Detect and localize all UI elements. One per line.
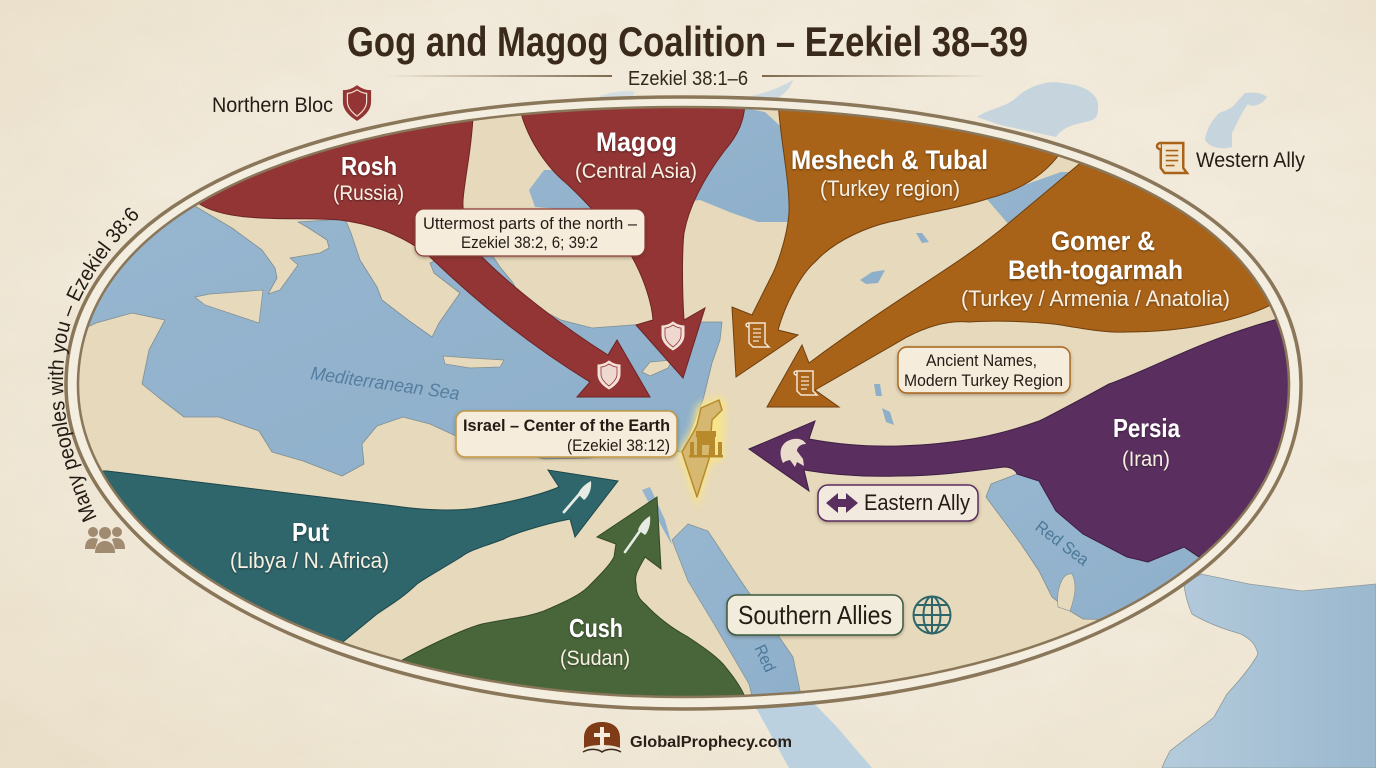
label: Rosh xyxy=(333,151,404,205)
legend: Northern Bloc: Northern Bloc xyxy=(212,94,333,117)
map inside ring xyxy=(79,108,1288,696)
callout: ancient names xyxy=(898,347,1070,393)
arrow: Put xyxy=(60,470,618,646)
subtitle with rules: Ezekiel 38:1–6 xyxy=(628,68,748,90)
label: Persia: Persia xyxy=(1113,413,1180,443)
icon: helmet on Persia arrow xyxy=(781,439,806,467)
Black Sea xyxy=(529,108,790,222)
label: Magog: (Central Asia) xyxy=(575,160,697,183)
footer brand: GlobalProphecy.com xyxy=(630,734,792,751)
icon: group of people xyxy=(85,527,125,553)
outer map: seas and lakes beyond the ring xyxy=(598,80,1376,768)
territory xyxy=(682,400,722,497)
label: Rosh: (Russia) xyxy=(333,182,404,205)
arrow: Rosh xyxy=(190,100,650,397)
callout: uttermost parts: Ezekiel 38:2, 6; 39:2 xyxy=(461,233,598,252)
Cyprus xyxy=(642,360,672,376)
arrow: Magog xyxy=(518,100,745,378)
icon: double arrow xyxy=(826,493,858,513)
legend: Northern Bloc xyxy=(212,86,370,120)
icon: shield on Magog arrow xyxy=(662,322,684,350)
Persian Gulf xyxy=(986,474,1210,620)
label: Cush: (Sudan) xyxy=(560,647,630,670)
legend: Eastern Ally: Eastern Ally xyxy=(864,490,970,515)
temple xyxy=(689,431,723,458)
Sicily xyxy=(195,290,263,323)
callout: ancient names: Ancient Names, xyxy=(926,351,1037,370)
legend: Western Ally: Western Ally xyxy=(1196,149,1305,172)
callout: Israel center of the earth: Israel – Center of the Earth xyxy=(463,416,670,435)
Crete xyxy=(443,356,504,368)
label: Gomer and Beth-togarmah: (Turkey / Armenia / Anatolia) xyxy=(961,286,1230,311)
icon: scroll xyxy=(1157,143,1187,173)
logo xyxy=(583,722,621,752)
icon: scroll on Gomer arrow xyxy=(794,371,817,395)
Mediterranean Sea xyxy=(60,205,722,476)
icon: spear on Put arrow xyxy=(564,481,591,512)
label: Cush xyxy=(560,613,630,670)
legend: Southern Allies: Southern Allies xyxy=(738,600,892,630)
map label: Red Sea gulf: Red Sea xyxy=(1032,517,1093,570)
Red Sea xyxy=(672,524,802,704)
label: Put: Put xyxy=(292,517,329,547)
callout: uttermost parts xyxy=(415,209,645,256)
legend: Southern Allies xyxy=(727,595,950,635)
label: Cush: Cush xyxy=(569,613,623,643)
label: Rosh: Rosh xyxy=(341,151,397,181)
label: Gomer and Beth-togarmah xyxy=(961,226,1230,311)
side label: many peoples: Many peoples with you – Ezekiel 38:6 xyxy=(48,208,138,522)
glow xyxy=(682,400,722,497)
icon: globe xyxy=(914,596,950,634)
label: Put: (Libya / N. Africa) xyxy=(230,548,389,573)
map label: Mediterranean Sea: Mediterranean Sea xyxy=(309,362,461,404)
callout: Israel center of the earth xyxy=(456,411,677,457)
label: Meshech and Tubal xyxy=(791,145,988,201)
Qatar peninsula xyxy=(1058,574,1075,611)
label: Put xyxy=(230,517,389,573)
land base xyxy=(79,110,1275,694)
label: Persia: (Iran) xyxy=(1122,448,1170,471)
Israel marker xyxy=(682,400,723,497)
Gulf of Suez xyxy=(642,487,672,545)
inland lakes xyxy=(860,233,929,425)
icon: spear on Cush arrow xyxy=(625,516,650,552)
arrow: Persia xyxy=(749,319,1320,562)
title: Gog and Magog Coalition – Ezekiel 38–39 xyxy=(347,18,1028,65)
label: Gomer and Beth-togarmah: Gomer & xyxy=(1051,226,1155,256)
label: Meshech and Tubal: (Turkey region) xyxy=(820,176,960,201)
callout: ancient names: Modern Turkey Region xyxy=(904,371,1063,390)
icon: shield xyxy=(344,86,370,120)
arrow: Gomer and Beth-togarmah xyxy=(766,164,1270,408)
label: Magog xyxy=(575,127,697,183)
footer brand xyxy=(583,722,792,752)
callout: Israel center of the earth: (Ezekiel 38:12) xyxy=(567,436,670,455)
label: Persia xyxy=(1113,413,1180,471)
map label: Red: Red xyxy=(750,642,779,675)
label: Magog: Magog xyxy=(596,127,677,157)
callout: uttermost parts: Uttermost parts of the north – xyxy=(423,214,638,233)
icon: shield on Rosh arrow xyxy=(598,361,620,389)
icon: scroll on Meshech arrow xyxy=(746,323,769,347)
legend: Western Ally xyxy=(1157,143,1305,173)
arrow: Meshech and Tubal xyxy=(732,100,1061,377)
label: Gomer and Beth-togarmah: Beth-togarmah xyxy=(1008,255,1183,285)
ring border xyxy=(66,97,1301,709)
legend: Eastern Ally xyxy=(818,485,978,521)
label: Meshech and Tubal: Meshech & Tubal xyxy=(791,145,988,175)
arrow: Cush xyxy=(402,496,744,696)
Caspian Sea xyxy=(987,172,1069,224)
